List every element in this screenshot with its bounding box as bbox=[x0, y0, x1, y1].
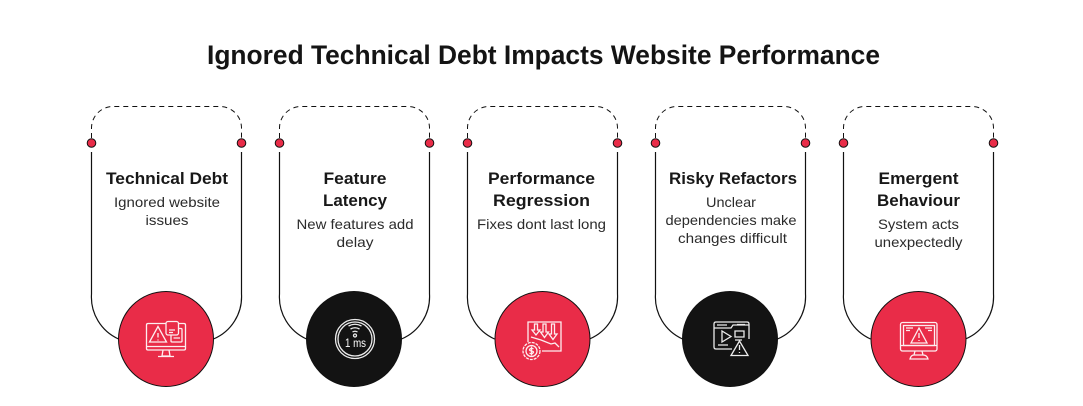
icon: monitor with warning and documents bbox=[146, 322, 186, 356]
icon: monitor with warning bbox=[900, 322, 937, 359]
frame connector bbox=[839, 106, 998, 339]
frame connector bbox=[87, 106, 246, 339]
frame connector bbox=[651, 106, 810, 339]
panel: Technical Debt bbox=[87, 106, 246, 386]
description: dependencies make bbox=[666, 212, 797, 228]
heading bbox=[323, 169, 388, 210]
heading: Performance bbox=[488, 169, 595, 188]
description bbox=[666, 194, 797, 246]
icon: 1 ms latency gauge: 1 ms bbox=[345, 338, 366, 350]
icon circle bbox=[682, 292, 778, 386]
description bbox=[296, 216, 414, 250]
panel: Risky Refactors bbox=[651, 106, 810, 386]
title: Ignored Technical Debt Impacts Website Performance bbox=[207, 40, 880, 70]
description bbox=[114, 194, 220, 228]
description: New features add bbox=[296, 216, 414, 232]
heading: Risky Refactors bbox=[669, 169, 797, 188]
panel: Performance Regression bbox=[463, 106, 622, 386]
panel: Feature Latency bbox=[275, 106, 434, 386]
description: issues bbox=[146, 212, 188, 228]
description: Ignored website bbox=[114, 194, 220, 210]
heading: Feature bbox=[324, 169, 386, 188]
description: Unclear bbox=[706, 194, 756, 210]
description: System acts bbox=[878, 216, 959, 232]
icon: falling arrows chart with coin gear bbox=[523, 322, 561, 360]
heading bbox=[877, 169, 960, 210]
icon circle bbox=[306, 292, 402, 386]
heading: Behaviour bbox=[877, 191, 960, 210]
icon: video window with warning bbox=[714, 322, 749, 356]
heading: Regression bbox=[493, 191, 590, 210]
heading: Technical Debt bbox=[106, 169, 228, 188]
frame connector bbox=[275, 106, 434, 339]
frame connector bbox=[463, 106, 622, 339]
description: unexpectedly bbox=[874, 234, 962, 250]
panel: Emergent Behaviour bbox=[839, 106, 998, 386]
icon circle bbox=[118, 292, 214, 386]
heading bbox=[488, 169, 595, 210]
heading: Emergent bbox=[878, 169, 959, 188]
icon circle bbox=[495, 292, 590, 386]
icon circle bbox=[871, 292, 966, 386]
icon: 1 ms latency gauge bbox=[336, 320, 374, 358]
description: Fixes dont last long bbox=[477, 216, 606, 232]
description bbox=[874, 216, 962, 250]
description: changes difficult bbox=[678, 230, 787, 246]
description: delay bbox=[336, 234, 374, 250]
heading: Latency bbox=[323, 191, 388, 210]
